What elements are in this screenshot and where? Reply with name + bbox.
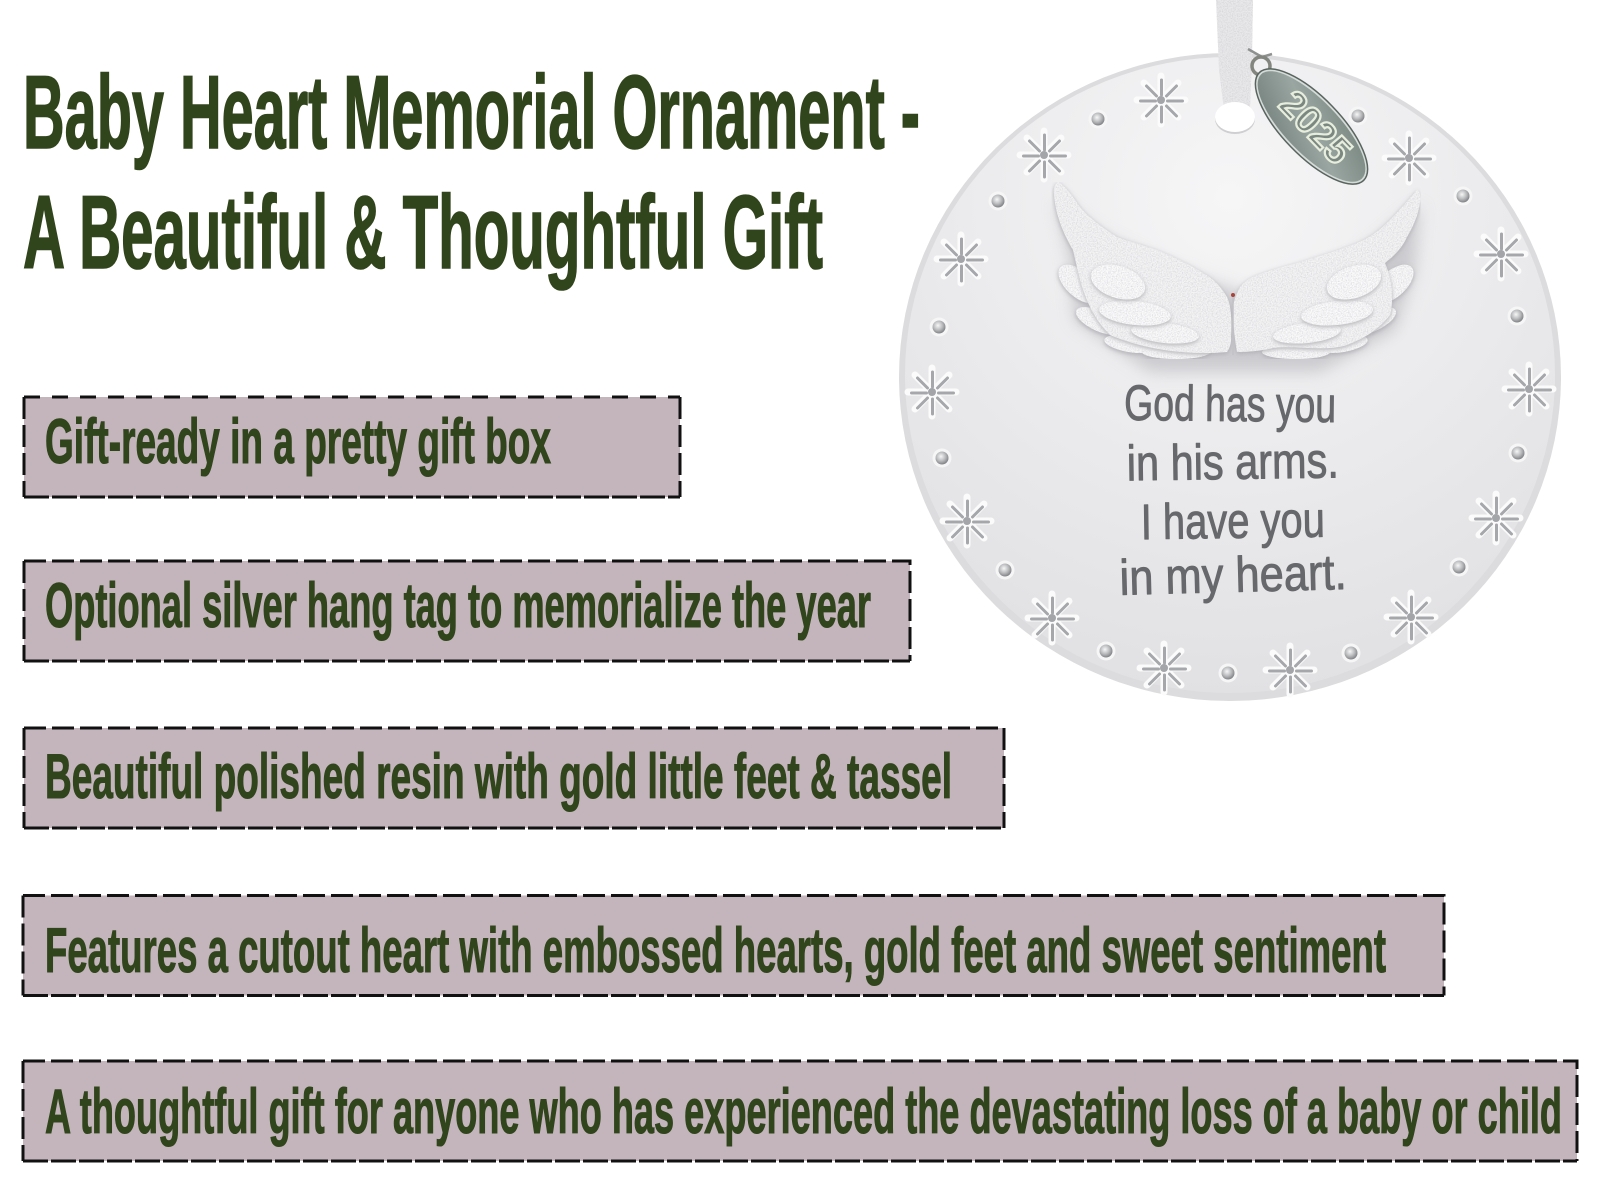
feature box: polished resin [24,728,1004,828]
sentiment text [1119,375,1347,606]
beads [930,106,1528,682]
silver year tag [1239,49,1384,201]
ribbon [1215,0,1255,134]
feature box: gift box: Gift-ready in a pretty gift box [45,407,551,477]
title [23,55,920,291]
ornament [899,0,1561,701]
ornament disc [899,53,1561,701]
angel wings [1052,182,1420,372]
feature box: hang tag: Optional silver hang tag to memorialize the year [45,571,871,641]
feature box: hang tag [24,561,910,661]
sentiment text: in my heart. [1119,544,1347,606]
sentiment text: I have you [1140,492,1325,550]
feature box: thoughtful gift [23,1061,1577,1161]
feature box: gift box [24,397,680,497]
snowflakes [908,76,1553,694]
sentiment text: God has you [1124,375,1336,433]
feature box: cutout heart [23,896,1444,996]
feature box: polished resin: Beautiful polished resin with gold little feet & tassel [45,742,952,812]
sentiment text: in his arms. [1126,432,1339,491]
silver year tag: 2025 [1271,83,1359,173]
title: Baby Heart Memorial Ornament - [23,55,920,171]
title: A Beautiful & Thoughtful Gift [23,175,823,291]
